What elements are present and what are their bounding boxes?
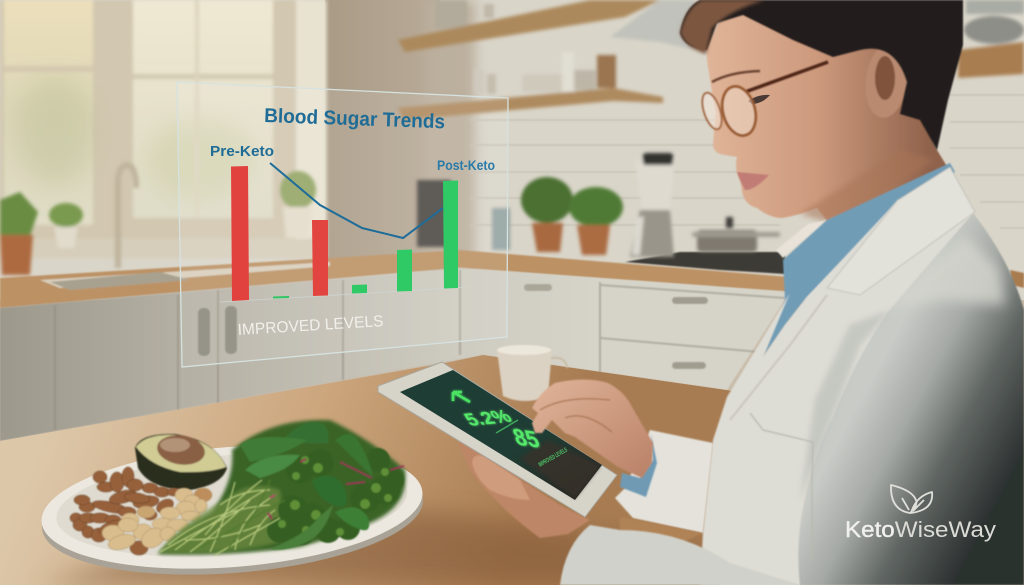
hair highlight <box>680 0 765 54</box>
lab coat front panel <box>700 200 973 585</box>
lips <box>737 172 769 190</box>
table peek below sleeve <box>620 517 702 547</box>
sprout mass <box>158 486 285 553</box>
lapel and collar <box>827 167 975 295</box>
countertop and stove <box>0 250 1024 308</box>
upper hand touching tablet <box>532 380 653 478</box>
label: post-keto: Post-Keto <box>437 158 495 173</box>
logo: KetoWiseWay <box>845 485 996 542</box>
arrow icon <box>453 392 470 402</box>
inner white collar <box>776 220 827 258</box>
tablet <box>378 362 617 517</box>
kitchen objects: plants, blender, pot, faucet <box>0 153 780 275</box>
avocado <box>135 432 227 490</box>
face and neck <box>707 5 948 262</box>
table shadow, lower area <box>40 510 720 585</box>
coffee mug <box>497 345 567 401</box>
tablet body <box>378 362 617 517</box>
front shadow <box>800 310 890 500</box>
hair <box>680 0 963 150</box>
plate <box>37 432 428 585</box>
lapel fold <box>730 295 827 420</box>
kale highlights <box>278 456 392 536</box>
icon: twin leaves <box>891 485 932 513</box>
label: pre-keto: Pre-Keto <box>210 143 274 160</box>
plate of keto food <box>37 420 428 585</box>
salad greens <box>158 420 406 555</box>
tablet screen <box>400 370 602 500</box>
tablet reading: percent: 5.2% <box>460 406 516 430</box>
eye <box>748 95 770 104</box>
lab coat arm <box>790 213 1024 585</box>
chart title: Blood Sugar Trends <box>264 105 445 133</box>
background: blurred kitchen <box>0 0 1024 441</box>
far sleeve with cuff <box>615 430 713 533</box>
kitchen wall with tiles <box>0 0 1024 300</box>
eyebrow <box>712 71 760 82</box>
lower hand holding tablet <box>458 442 590 538</box>
salad base mass <box>158 420 406 554</box>
glass pane <box>177 82 508 367</box>
neck shadow <box>800 150 935 222</box>
coat pocket <box>750 413 813 560</box>
doctor in lab coat <box>458 0 1024 585</box>
kale clusters <box>267 448 404 545</box>
cabinets <box>0 268 790 441</box>
screen reflection <box>520 440 600 498</box>
blue shirt collar <box>763 163 955 357</box>
divider on screen <box>496 420 518 433</box>
window with frames <box>0 0 327 258</box>
near sleeve <box>560 525 800 585</box>
shelves and jars <box>398 0 1024 120</box>
sprouts <box>160 480 285 555</box>
tablet caption: IMPROVED LEVELS <box>538 446 569 469</box>
nuts: almonds and peanuts <box>70 467 212 555</box>
radicchio accents <box>268 459 404 519</box>
bar chart <box>220 163 468 302</box>
shirt cuff <box>620 434 657 497</box>
glass chart panel <box>177 82 508 367</box>
logo wordmark: KetoWiseWay <box>845 517 996 542</box>
spinach leaves <box>240 422 373 550</box>
tablet reading: value: 85 <box>509 424 543 453</box>
shoulder highlight <box>880 235 1005 310</box>
lower thumb <box>472 455 530 500</box>
glasses <box>699 62 828 139</box>
table surface <box>0 355 740 585</box>
caption: improved levels: IMPROVED LEVELS <box>237 313 384 339</box>
ear <box>861 39 913 121</box>
